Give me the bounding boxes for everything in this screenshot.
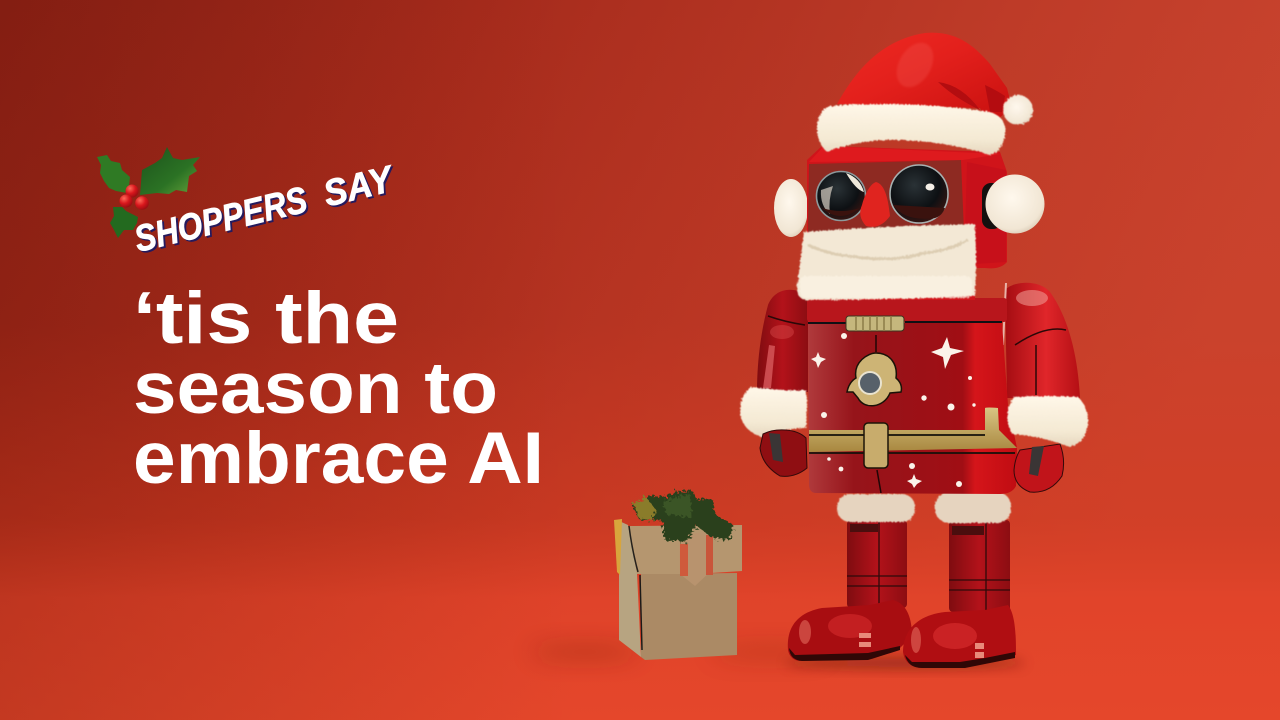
gift box <box>614 490 742 660</box>
left ear <box>774 179 808 237</box>
head <box>807 146 1007 300</box>
left cuff <box>740 387 807 438</box>
zipper <box>846 316 904 331</box>
hat trim <box>817 104 1005 155</box>
holly leaf bottom <box>110 207 138 238</box>
left eye <box>816 172 866 220</box>
gift box lid <box>629 525 742 574</box>
gift box front <box>641 573 737 660</box>
title: ‘tis the <box>133 278 399 359</box>
title <box>133 278 544 499</box>
floor shadows <box>530 646 1025 668</box>
holly berries <box>120 184 149 210</box>
left boot <box>788 600 912 661</box>
greenery <box>632 490 733 542</box>
left leg fur <box>837 494 915 522</box>
icon: holly sprig <box>97 147 200 238</box>
gold tinsel <box>614 519 622 575</box>
ribbon <box>679 532 713 586</box>
kicker: shoppers say: SAY <box>319 158 399 214</box>
gift box side <box>617 520 641 657</box>
nose <box>860 182 890 227</box>
kicker: shoppers say: SHOPPERS <box>130 179 311 260</box>
beard <box>797 224 976 300</box>
robot santa <box>740 33 1088 668</box>
body <box>807 298 1017 494</box>
left leg <box>847 520 907 608</box>
snow stars <box>811 333 976 488</box>
hat pompom <box>1003 95 1033 125</box>
title: season to <box>133 348 498 429</box>
medallion <box>847 353 901 406</box>
right cuff <box>1007 396 1088 447</box>
right ear <box>982 174 1044 234</box>
holly leaf top left <box>97 155 130 193</box>
left hand <box>760 430 807 476</box>
santa hat <box>817 33 1033 155</box>
left arm <box>757 290 808 392</box>
right eye <box>890 165 948 223</box>
right hand <box>1014 444 1064 492</box>
belt <box>809 408 1017 453</box>
kicker: shoppers say <box>130 157 401 262</box>
kicker: shoppers say: SHOPPERS <box>132 180 313 261</box>
buckle <box>864 423 888 468</box>
right boot <box>903 605 1016 668</box>
title: embrace AI <box>133 418 544 499</box>
right leg fur <box>935 492 1011 523</box>
right arm <box>1003 283 1080 398</box>
holly leaf right <box>140 147 200 195</box>
kicker: shoppers say: SAY <box>321 159 401 216</box>
right leg <box>949 520 1010 612</box>
